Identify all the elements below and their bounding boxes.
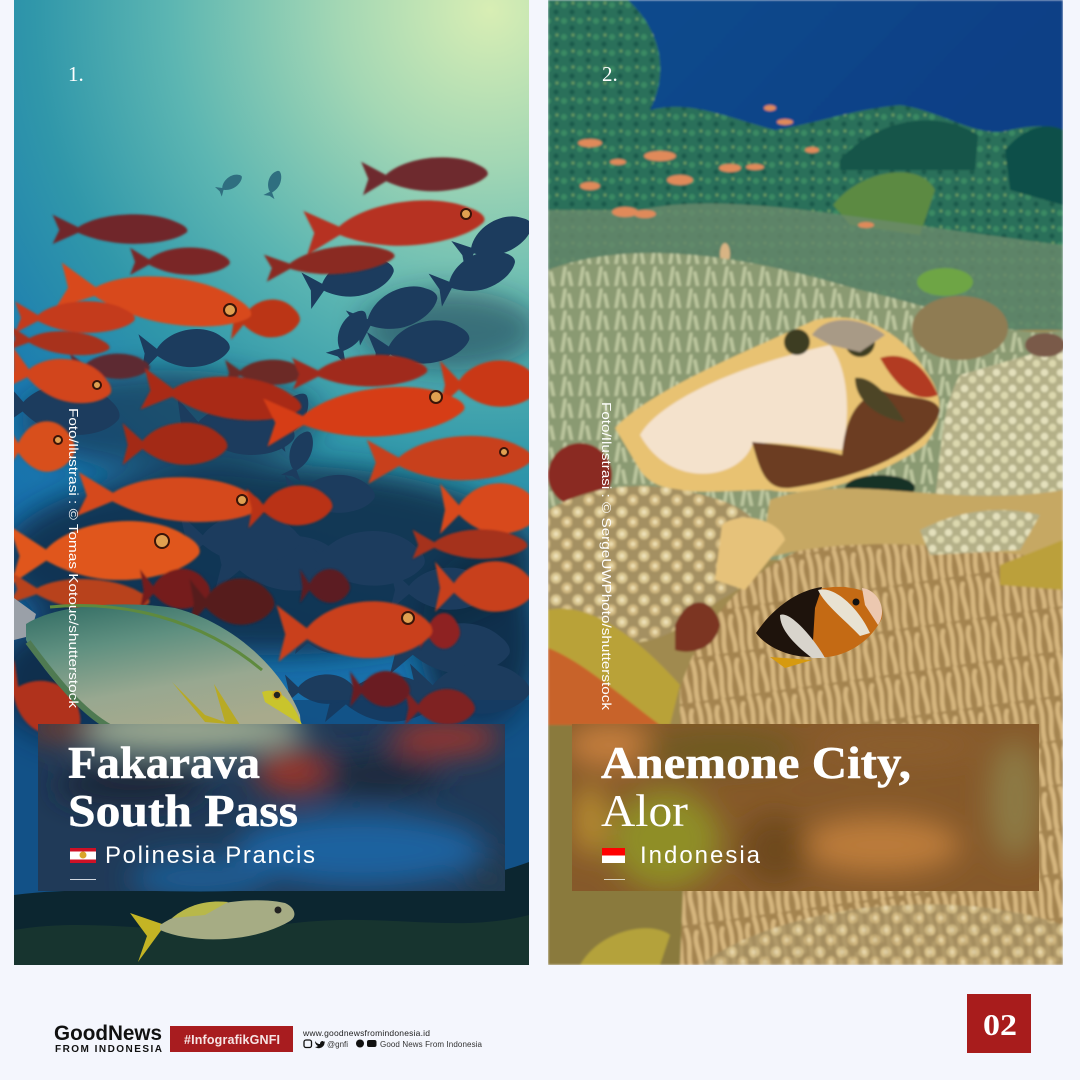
contact details and social icons: @gnfi [327,1040,348,1049]
red fish school [0,155,540,748]
rocks upper right [912,296,1008,360]
rock lower left [548,518,785,725]
green shadow under rock [844,474,916,494]
pale anemone field [548,253,1063,560]
clownfish [756,587,882,668]
icon: instagram [304,1040,312,1048]
floor of the reef below caption [548,725,690,965]
heading: Anemone City, Alor [601,738,911,836]
icon: twitter [315,1041,325,1048]
contact details and social icons [302,1028,483,1049]
caption panel: Fakarava South Pass [38,724,505,891]
credit: right photo: Foto/Ilustrasi : © SergeUWPhoto/shutterstock [599,402,614,711]
credit: left photo: Foto/Ilustrasi : © Tomas Kotouc/shutterstock [66,408,81,709]
icon: French Polynesia flag [70,848,96,863]
heading: Fakarava South Pass: South Pass [68,786,298,836]
number: 2.: 2. [602,62,618,86]
icon: facebook [356,1040,364,1048]
contact details and social icons: Good News From Indonesia [380,1040,483,1049]
panel: Fakarava South Pass photo [0,0,540,965]
deep shadow of the school [0,290,540,750]
deep lower water [14,700,529,900]
hashtag badge [170,1026,293,1052]
footer logo: GoodNews From Indonesia [54,1022,162,1055]
dark fish school [0,207,538,722]
footer logo: GoodNews From Indonesia: GoodNews [54,1022,162,1045]
panel: Anemone City photo [548,0,1065,965]
small fish near the surface [215,169,284,199]
icon: Indonesia flag [602,848,625,863]
icon: youtube [367,1040,376,1047]
bubble anemone [548,486,765,642]
heading: Fakarava South Pass: Fakarava [68,738,260,788]
short rule [604,879,625,880]
heading: Anemone City, Alor: Alor [601,786,688,836]
hashtag badge: #InfografikGNFI [184,1033,280,1047]
deep blue water [627,0,1063,134]
yellow-tailed fish [130,900,294,962]
page number badge: 02 [983,1007,1017,1042]
surgeonfish [14,598,302,740]
footer logo: GoodNews From Indonesia: FROM INDONESIA [55,1044,162,1055]
short rule [70,879,96,880]
reef floor [14,862,529,965]
school of small orange fish [578,105,874,265]
country: Indonesia: Indonesia [640,842,761,869]
heading: Fakarava South Pass [68,738,298,836]
country: Polinesia Prancis: Polinesia Prancis [105,842,315,869]
number: 1.: 1. [68,62,84,86]
contact details and social icons: www.goodnewsfromindonesia.id [302,1028,430,1038]
large rock [615,317,940,492]
page number badge [967,994,1031,1053]
heading: Anemone City, Alor: Anemone City, [601,738,911,788]
fish eyes [54,209,508,624]
long tentacle anemone [680,527,1063,965]
caption panel: Anemone City [565,723,1041,891]
reef greens [548,0,1063,330]
red coral [548,443,612,507]
